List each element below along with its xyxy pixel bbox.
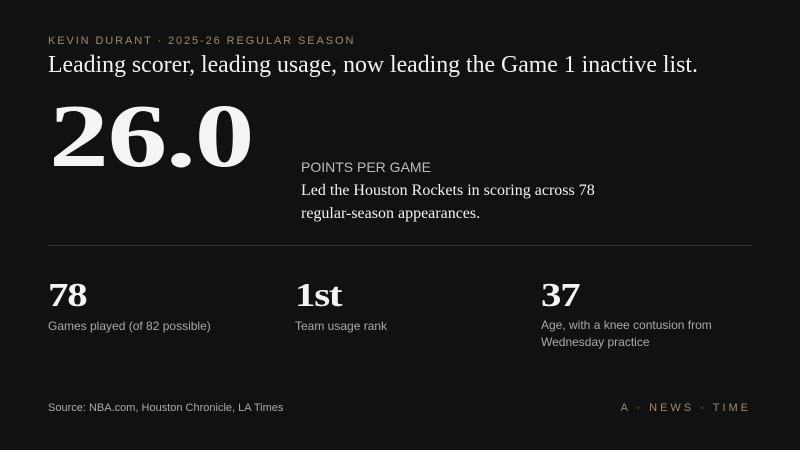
big stat description: Led the Houston Rockets in scoring across 78 regular-season appearances. xyxy=(301,182,595,222)
kicker: KEVIN DURANT · 2025-26 REGULAR SEASON xyxy=(48,35,355,47)
stat: usage rank: 1st xyxy=(295,277,341,314)
stat: usage rank: Team usage rank xyxy=(295,319,387,333)
stat: games played: 78 xyxy=(48,277,86,314)
brand: A · NEWS · TIME xyxy=(621,402,751,414)
big stat: 26.0: 26.0 xyxy=(49,87,253,186)
stat: age xyxy=(541,277,712,349)
stat: age: 37 xyxy=(541,277,579,314)
big stat label: POINTS PER GAME xyxy=(301,159,431,175)
stat: usage rank xyxy=(295,277,387,333)
stat: games played xyxy=(48,277,211,333)
source: Source: NBA.com, Houston Chronicle, LA Times xyxy=(48,402,283,414)
stat: games played: Games played (of 82 possible) xyxy=(48,319,211,333)
headline: Leading scorer, leading usage, now leading the Game 1 inactive list. xyxy=(48,52,698,78)
stat: age: Age, with a knee contusion from Wednesday practice xyxy=(541,318,712,349)
